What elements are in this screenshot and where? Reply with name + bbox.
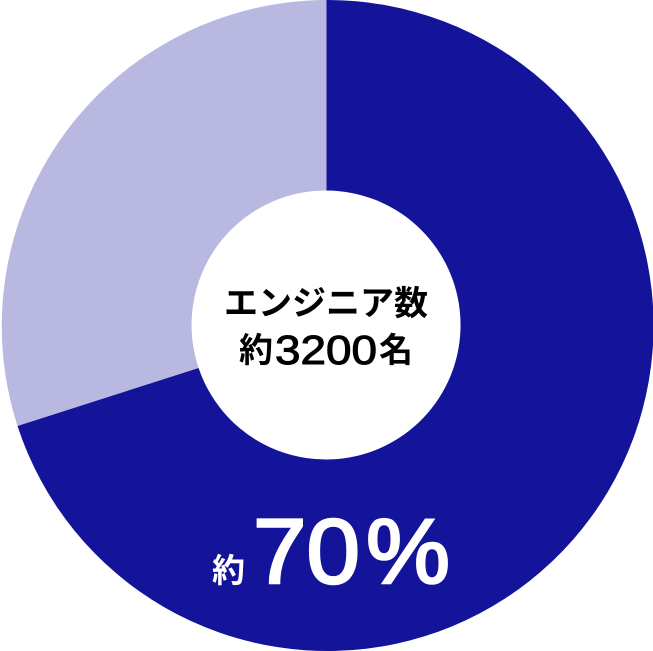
center label: 名	[379, 332, 413, 370]
center label	[224, 285, 428, 373]
percentage label: 70	[253, 501, 360, 603]
percentage label	[212, 501, 450, 603]
percentage label: 約	[212, 552, 245, 589]
percentage label: %	[366, 501, 450, 603]
center label: エンジニア数	[224, 285, 428, 323]
center label: 約	[239, 332, 273, 370]
center label: 3200	[275, 327, 377, 373]
donut segment: remaining 30%	[2, 0, 327, 426]
